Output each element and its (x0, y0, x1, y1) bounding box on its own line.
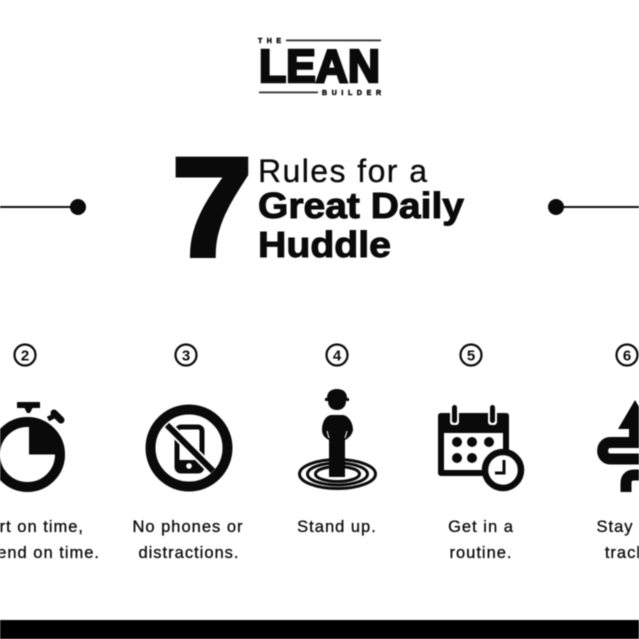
icon: stopwatch (0, 402, 61, 487)
title: 7 Rules for a Great Daily Huddle: Great Daily (258, 185, 464, 226)
rule 6: stay on track (597, 344, 639, 562)
caption (0, 518, 100, 562)
right connector line with dot (548, 199, 639, 215)
caption: Stand up. (297, 518, 377, 536)
rule 4: stand up (297, 344, 377, 536)
caption (132, 518, 244, 562)
number badge 3 (176, 344, 196, 366)
icon: no phones (150, 410, 228, 486)
number badge 4 (326, 344, 348, 366)
title: 7 Rules for a Great Daily Huddle: Rules for a (258, 153, 427, 189)
rule 5: get in a routine (438, 344, 521, 562)
caption: Get in a (448, 518, 514, 536)
title: 7 Rules for a Great Daily Huddle: Huddle (258, 224, 391, 265)
left connector line with dot (0, 199, 86, 215)
number badge 5: 5 (467, 348, 475, 364)
icon: person standing on target (300, 389, 376, 488)
icon: calendar with clock (438, 403, 521, 488)
number badge 6: 6 (623, 348, 631, 364)
number badge 5 (460, 344, 482, 366)
number badge 3: 3 (182, 348, 190, 364)
number badge 4: 4 (333, 348, 342, 364)
caption (597, 518, 639, 562)
logo: The Lean Builder: LEAN (259, 40, 380, 92)
rule 3: no phones (132, 344, 244, 562)
title: 7 Rules for a Great Daily Huddle: 7 (172, 128, 252, 286)
rule 2: start on time (0, 344, 100, 562)
number badge 6 (616, 344, 638, 366)
caption: distractions. (138, 544, 240, 562)
logo: The Lean Builder: BUILDER (322, 90, 381, 97)
number badge 2 (14, 344, 36, 366)
bottom black bar (0, 620, 639, 639)
caption: No phones or (132, 518, 244, 536)
title: 7 Rules for a Great Daily Huddle (172, 128, 464, 286)
icon: winding road arrow (603, 400, 639, 492)
logo: The Lean Builder: THE (258, 38, 281, 45)
caption (448, 518, 514, 562)
caption: routine. (449, 544, 513, 562)
number badge 2: 2 (21, 348, 29, 364)
